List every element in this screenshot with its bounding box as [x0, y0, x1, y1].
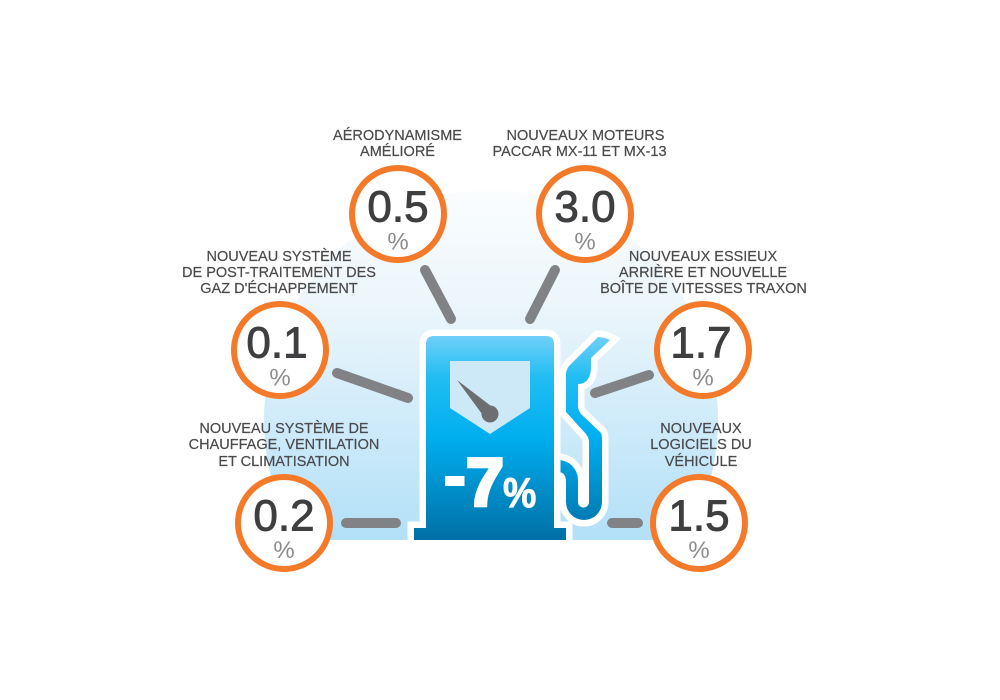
item: aérodynamisme [333, 127, 462, 260]
item: logiciels [650, 421, 752, 569]
item: aérodynamisme: % [387, 228, 409, 256]
item: moteurs: PACCAR MX-11 ET MX-13 [492, 144, 667, 160]
gauge needle [457, 380, 498, 422]
item: logiciels: 1.5 [668, 492, 730, 540]
background semicircle [264, 219, 718, 540]
item: post-traitement: % [269, 364, 291, 392]
item: moteurs: % [574, 228, 596, 256]
pump body [414, 336, 566, 540]
item: logiciels: % [688, 537, 710, 564]
item: moteurs: 3.0 [554, 182, 616, 232]
item: logiciels: NOUVEAUX [660, 421, 742, 437]
item: post-traitement [182, 248, 376, 396]
item: chauffage: ET CLIMATISATION [218, 454, 350, 470]
item: aérodynamisme: AMÉLIORÉ [360, 143, 435, 160]
item: aérodynamisme: AÉRODYNAMISME [333, 127, 462, 144]
item: chauffage: 0.2 [253, 492, 315, 540]
item: essieux: % [692, 364, 714, 392]
item: essieux: ARRIÈRE ET NOUVELLE [619, 264, 787, 281]
gauge panel [450, 361, 530, 434]
item: aérodynamisme: 0.5 [367, 182, 429, 232]
item: moteurs: NOUVEAUX MOTEURS [507, 128, 664, 144]
item: chauffage [189, 420, 379, 569]
item: essieux: NOUVEAUX ESSIEUX [629, 249, 777, 265]
value: -7%: % [503, 470, 536, 516]
item: essieux: 1.7 [670, 318, 732, 368]
item: post-traitement: GAZ D'ÉCHAPPEMENT [200, 280, 358, 297]
item: post-traitement: 0.1 [246, 318, 308, 368]
pump hose and nozzle [550, 337, 610, 520]
item: logiciels: VÉHICULE [665, 453, 738, 470]
fuel pump icon [414, 336, 610, 540]
item: essieux: BOÎTE DE VITESSES TRAXON [600, 280, 807, 297]
item: logiciels: LOGICIELS DU [650, 437, 752, 453]
item: post-traitement: NOUVEAU SYSTÈME [206, 248, 352, 265]
item: essieux [600, 249, 807, 396]
item: chauffage: % [273, 537, 295, 564]
item: chauffage: NOUVEAU SYSTÈME DE [199, 420, 369, 437]
item: post-traitement: DE POST-TRAITEMENT DES [182, 265, 376, 281]
item: moteurs [492, 128, 667, 260]
value: -7% [445, 444, 536, 520]
item: chauffage: CHAUFFAGE, VENTILATION [189, 437, 379, 453]
connector bars [337, 270, 649, 523]
value: -7%: 7 [466, 444, 504, 520]
